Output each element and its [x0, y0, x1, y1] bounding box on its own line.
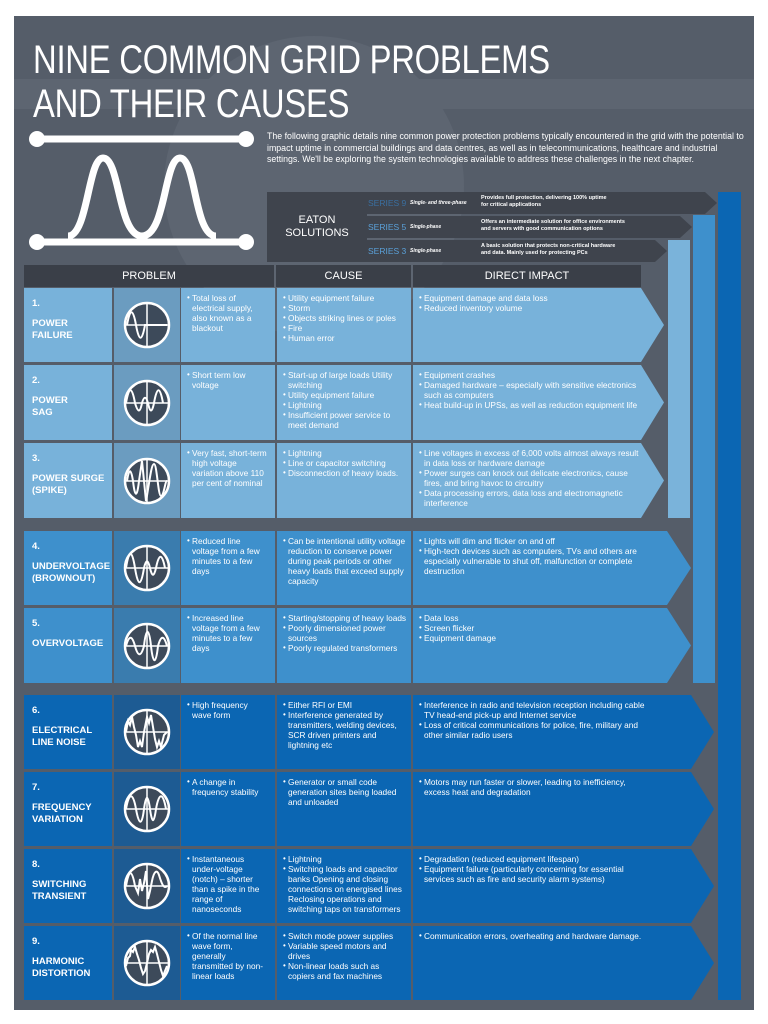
row 7: frequency variation: Motors may run faster or slower, leading to inefficiency, excess heat and degradation	[424, 777, 626, 797]
table header: DIRECT IMPACT	[485, 270, 569, 282]
panel: eaton solutions: for critical applications	[481, 202, 541, 208]
panel: eaton solutions: SERIES 3	[368, 246, 406, 256]
title: AND THEIR CAUSES	[33, 82, 349, 126]
row 4: undervoltage: Lights will dim and flicker on and off	[424, 536, 555, 546]
row 3: power surge: Disconnection of heavy loads.	[288, 468, 398, 478]
row 1: power failure: Total loss of electrical supply, also known as a blackout	[192, 293, 253, 333]
row 2: power sag: Short term low voltage	[192, 370, 245, 390]
row 2: power sag: Start-up of large loads Utility switching	[288, 370, 392, 390]
panel: eaton solutions: and servers with good communication options	[481, 226, 603, 232]
intro text: The following graphic details nine common power protection problems typically encountered in the grid with the potential to impact uptime in commercial buildings and data centres, as well as in telecommunications, healthcare and industrial settings. We'll be exploring the system technologies available to address these challenges in the next chapter.	[267, 131, 744, 164]
row 5: overvoltage: Poorly regulated transformers	[288, 643, 397, 653]
row 2: power sag: Insufficient power service to meet demand	[288, 410, 390, 430]
title	[33, 38, 550, 126]
row 8: switching transient: Lightning	[288, 854, 322, 864]
row 9: harmonic distortion	[24, 926, 714, 1000]
panel: eaton solutions: Single-phase	[410, 248, 441, 254]
row 3: power surge: Line or capacitor switching	[288, 458, 386, 468]
row 6: electrical line noise: 6.	[32, 705, 40, 716]
table header	[24, 265, 641, 287]
panel: eaton solutions: SERIES 5	[368, 222, 406, 232]
row 8: switching transient	[24, 849, 714, 923]
row 5: overvoltage: Increased line voltage from a few minutes to a few days	[192, 613, 260, 653]
row 9: harmonic distortion: Switch mode power supplies	[288, 931, 393, 941]
panel: eaton solutions: SOLUTIONS	[285, 227, 349, 239]
row 1: power failure: Objects striking lines or poles	[288, 313, 396, 323]
row 6: electrical line noise: Interference generated by transmitters, welding devices, SCR driven printers and lightning etc	[288, 710, 397, 750]
row 5: overvoltage: 5.	[32, 618, 40, 629]
row 7: frequency variation: A change in frequency stability	[192, 777, 258, 797]
icon: large wave	[29, 131, 254, 250]
row 2: power sag: Equipment crashes	[424, 370, 495, 380]
row 8: switching transient: 8.	[32, 859, 40, 870]
panel: eaton solutions: Offers an intermediate solution for office environments	[481, 219, 625, 225]
row 4: undervoltage: 4.	[32, 541, 40, 552]
title: NINE COMMON GRID PROBLEMS	[33, 38, 550, 82]
row 6: electrical line noise: Loss of critical communications for police, fire, military and other similar radio users	[424, 720, 638, 740]
row 2: power sag: Damaged hardware – especially with sensitive electronics such as computers	[424, 380, 636, 400]
row 2: power sag	[24, 365, 664, 440]
table header: PROBLEM	[122, 270, 176, 282]
row 1: power failure: Reduced inventory volume	[424, 303, 522, 313]
row 7: frequency variation: FREQUENCY	[32, 802, 92, 813]
row 4: undervoltage: Can be intentional utility voltage reduction to conserve power during peak periods or other heavy loads that exceed supply capacity	[288, 536, 405, 586]
row 7: frequency variation: VARIATION	[32, 814, 83, 825]
row 6: electrical line noise: Interference in radio and television reception including cable TV head-end pick-up and Internet service	[424, 700, 644, 720]
row 2: power sag: Heat build-up in UPSs, as well as reduction equipment life	[424, 400, 637, 410]
row 3: power surge: POWER SURGE	[32, 473, 104, 484]
row 3: power surge: Power surges can knock out delicate electronics, cause fires, and bring havoc to circuitry	[424, 468, 628, 488]
row 6: electrical line noise: High frequency wave form	[192, 700, 248, 720]
row 9: harmonic distortion: DISTORTION	[32, 968, 90, 979]
row 5: overvoltage	[24, 608, 691, 683]
row 1: power failure: Utility equipment failure	[288, 293, 374, 303]
row 4: undervoltage	[24, 531, 691, 605]
row 5: overvoltage: Data loss	[424, 613, 459, 623]
row 6: electrical line noise: Either RFI or EMI	[288, 700, 352, 710]
row 3: power surge: Very fast, short-term high voltage variation above 110 per cent of nominal	[192, 448, 267, 488]
row 3: power surge: Data processing errors, data loss and electromagnetic interference	[424, 488, 623, 508]
row 1: power failure	[24, 288, 664, 362]
row 8: switching transient: Switching loads and capacitor banks Opening and closing connections on energised lines Reclosing operations and switching taps on transformers	[288, 864, 402, 914]
panel: eaton solutions: EATON	[299, 214, 335, 226]
row 6: electrical line noise	[24, 695, 714, 769]
row 1: power failure: 1.	[32, 298, 40, 309]
panel: eaton solutions	[267, 192, 717, 262]
row 9: harmonic distortion: Communication errors, overheating and hardware damage.	[424, 931, 641, 941]
series 9 row	[367, 192, 717, 214]
table header: CAUSE	[325, 270, 362, 282]
row 1: power failure: Human error	[288, 333, 335, 343]
panel: eaton solutions: Single-phase	[410, 224, 441, 230]
row 8: switching transient: Degradation (reduced equipment lifespan)	[424, 854, 579, 864]
row 2: power sag: SAG	[32, 407, 53, 418]
row 2: power sag: Utility equipment failure	[288, 390, 374, 400]
row 5: overvoltage: OVERVOLTAGE	[32, 638, 103, 649]
series 3 row	[367, 240, 667, 262]
row 6: electrical line noise: LINE NOISE	[32, 737, 86, 748]
row 9: harmonic distortion: Of the normal line wave form, generally transmitted by non-linear loads	[192, 931, 263, 981]
row 9: harmonic distortion: 9.	[32, 936, 40, 947]
row 5: overvoltage: Screen flicker	[424, 623, 474, 633]
row 7: frequency variation: Generator or small code generation sites being loaded and unloaded	[288, 777, 396, 807]
row 1: power failure: POWER	[32, 318, 68, 329]
row 4: undervoltage: UNDERVOLTAGE	[32, 561, 110, 572]
row 1: power failure: Storm	[288, 303, 310, 313]
row 8: switching transient: Instantaneous under-voltage (notch) – shorter than a spike in the range of nanoseconds	[192, 854, 259, 914]
panel: eaton solutions: and data. Mainly used for protecting PCs	[481, 250, 588, 256]
row 2: power sag: 2.	[32, 375, 40, 386]
row 8: switching transient: SWITCHING	[32, 879, 86, 890]
row 3: power surge: 3.	[32, 453, 40, 464]
row 1: power failure: FAILURE	[32, 330, 73, 341]
row 4: undervoltage: Reduced line voltage from a few minutes to a few days	[192, 536, 260, 576]
row 1: power failure: Fire	[288, 323, 302, 333]
row 1: power failure: Equipment damage and data loss	[424, 293, 548, 303]
series 5 row	[367, 216, 692, 238]
row 5: overvoltage: Equipment damage	[424, 633, 496, 643]
panel: eaton solutions: Single- and three-phase	[410, 200, 467, 206]
row 7: frequency variation	[24, 772, 714, 846]
row 3: power surge: (SPIKE)	[32, 485, 67, 496]
row 2: power sag: Lightning	[288, 400, 322, 410]
row 5: overvoltage: Poorly dimensioned power sources	[288, 623, 386, 643]
row 4: undervoltage: (BROWNOUT)	[32, 573, 95, 584]
bars: series levels	[668, 240, 690, 518]
row 9: harmonic distortion: Variable speed motors and drives	[288, 941, 387, 961]
row 9: harmonic distortion: HARMONIC	[32, 956, 84, 967]
row 2: power sag: POWER	[32, 395, 68, 406]
row 5: overvoltage: Starting/stopping of heavy loads	[288, 613, 406, 623]
row 6: electrical line noise: ELECTRICAL	[32, 725, 92, 736]
row 3: power surge: Line voltages in excess of 6,000 volts almost always result in data loss or hardware damage	[424, 448, 638, 468]
row 9: harmonic distortion: Non-linear loads such as copiers and fax machines	[288, 961, 382, 981]
row 8: switching transient: Equipment failure (particularly concerning for essential services such as fire and security alarm systems)	[424, 864, 624, 884]
panel: eaton solutions: Provides full protection, delivering 100% uptime	[481, 195, 607, 201]
row 8: switching transient: TRANSIENT	[32, 891, 86, 902]
panel: eaton solutions: A basic solution that protects non-critical hardware	[481, 243, 615, 249]
panel: eaton solutions: SERIES 9	[368, 198, 406, 208]
row 3: power surge	[24, 443, 664, 518]
row 4: undervoltage: High-tech devices such as computers, TVs and others are especially vulnerable to shut off, malfunction or complete destruction	[424, 546, 637, 576]
row 3: power surge: Lightning	[288, 448, 322, 458]
row 7: frequency variation: 7.	[32, 782, 40, 793]
